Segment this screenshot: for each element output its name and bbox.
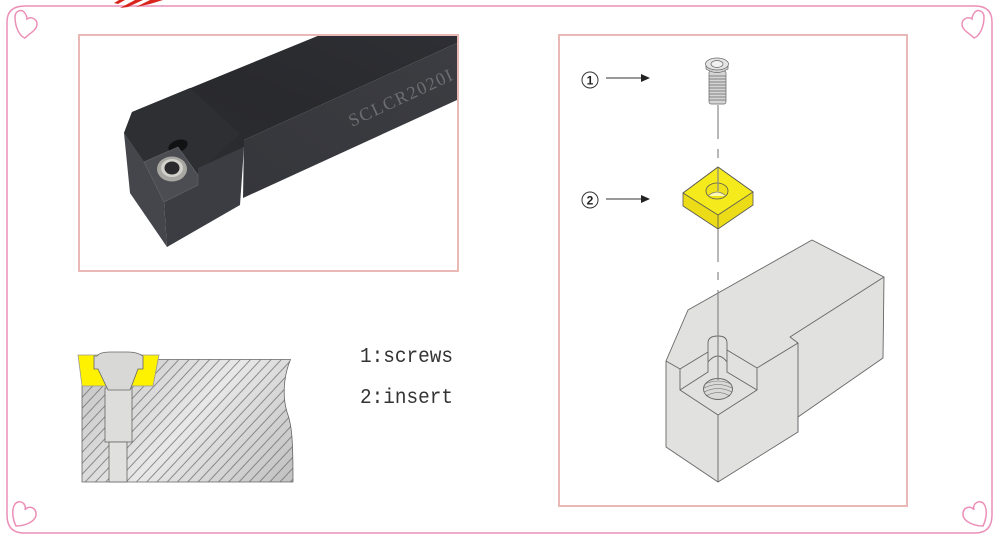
yellow insert (78, 355, 159, 386)
tool holder body (124, 35, 457, 247)
hatched body (82, 360, 293, 482)
axis line (717, 105, 719, 380)
clamping screw (157, 156, 187, 182)
red logo fragment (114, 0, 163, 8)
icon: heart top left (15, 11, 37, 38)
screw head (94, 352, 143, 390)
icon: heart bottom left (13, 502, 36, 526)
icon: heart top right (962, 11, 984, 38)
carbide insert (144, 147, 198, 202)
panel: product photo (79, 35, 458, 271)
icon: yellow insert (683, 167, 753, 229)
callout 1: 1 (587, 74, 594, 88)
callout 2: 2 (587, 194, 594, 208)
text: legend (360, 346, 453, 410)
text: legend: 1:screws (360, 346, 453, 369)
cross-section diagram (78, 352, 293, 482)
panel: exploded view (559, 35, 907, 506)
tool holder line drawing (666, 240, 884, 482)
icon: heart bottom right (963, 502, 986, 526)
icon: screw (706, 58, 728, 104)
screw bore (105, 388, 132, 442)
product marking text: SCLCR2020I (345, 64, 457, 131)
text: legend: 2:insert (360, 387, 453, 410)
callout 2 (582, 192, 650, 208)
callout 1 (582, 72, 650, 88)
screw hole (167, 137, 189, 155)
threaded hole (704, 378, 732, 400)
